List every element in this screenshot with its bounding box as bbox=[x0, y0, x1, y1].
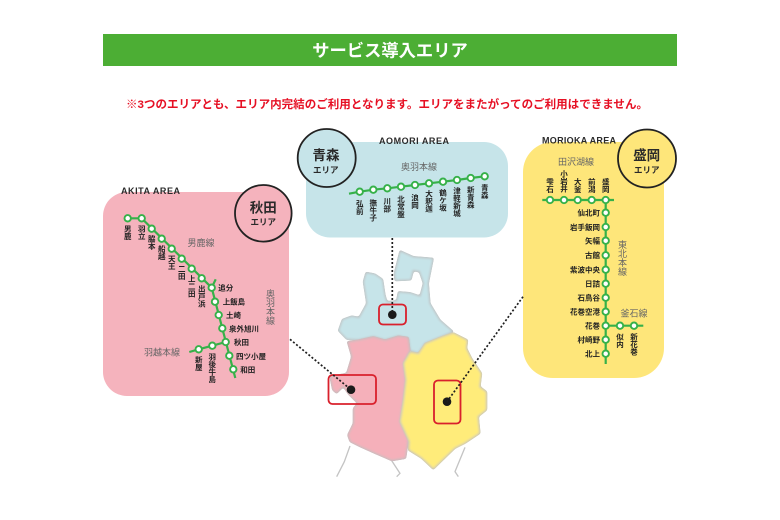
station labels: Morioka: 前潟 bbox=[587, 177, 596, 194]
line names: Akita: 奥羽本線 bbox=[265, 288, 275, 326]
map: Tohoku three prefectures bbox=[330, 251, 487, 477]
station labels: Morioka: 盛岡 bbox=[601, 177, 610, 193]
panel: Akita area: AKITA AREA bbox=[121, 186, 180, 196]
panel: Morioka area: MORIOKA AREA bbox=[542, 136, 616, 146]
station labels: Morioka: 花巻 bbox=[585, 320, 600, 330]
panel: Aomori area bbox=[298, 129, 508, 238]
station labels: Morioka: 新花巻 bbox=[629, 332, 638, 356]
station labels: Akita bbox=[123, 225, 266, 384]
line names: Akita: 羽越本線 bbox=[144, 346, 180, 358]
station labels: Aomori: 撫牛子 bbox=[369, 198, 378, 223]
badge: Akita bbox=[235, 185, 292, 242]
line names: Akita: 男鹿線 bbox=[188, 237, 215, 248]
station labels: Akita: 男鹿 bbox=[123, 225, 132, 241]
station labels: Morioka: 石鳥谷 bbox=[578, 292, 600, 302]
connector: Aomori panel to map bbox=[391, 238, 393, 315]
rail line: Oga and Ou main lines bbox=[128, 218, 235, 378]
stations: Akita bbox=[124, 215, 236, 372]
map border lines to neighbours bbox=[337, 446, 465, 477]
line name: Aomori: 奥羽本線 bbox=[401, 161, 437, 172]
station labels: Akita: 和田 bbox=[240, 364, 255, 374]
stations: Morioka bbox=[547, 197, 637, 357]
marker: Akita highlight bbox=[328, 375, 376, 404]
line names: Morioka: 東北本線 bbox=[617, 239, 627, 277]
station labels: Morioka: 北上 bbox=[585, 348, 600, 358]
badge: Morioka: 盛岡 bbox=[633, 147, 660, 163]
badge: Aomori: エリア bbox=[313, 165, 339, 175]
station labels: Morioka: 仙北町 bbox=[578, 208, 600, 218]
panel: Morioka area bbox=[523, 130, 676, 378]
prefecture: Akita bbox=[330, 336, 410, 461]
station labels: Akita: 泉外旭川 bbox=[229, 324, 259, 334]
station labels: Akita: 天王 bbox=[167, 255, 176, 270]
station labels: Aomori: 鶴ケ坂 bbox=[438, 188, 448, 213]
title banner: サービス導入エリア bbox=[312, 40, 468, 60]
connector: Akita panel to map bbox=[290, 339, 351, 390]
station labels: Akita: 羽立 bbox=[137, 225, 146, 240]
station labels: Akita: 土崎 bbox=[226, 310, 241, 320]
rail line: Ou main line Aomori bbox=[349, 176, 485, 194]
station labels: Aomori bbox=[355, 183, 489, 223]
panel: Akita area bbox=[103, 185, 292, 396]
badge: Akita: エリア bbox=[251, 217, 277, 227]
station labels: Morioka: 似内 bbox=[615, 333, 624, 349]
station labels: Akita: 上飯島 bbox=[223, 296, 246, 306]
station labels: Aomori: 大釈迦 bbox=[424, 189, 434, 214]
station labels: Aomori: 川部 bbox=[383, 198, 392, 214]
station labels: Aomori: 浪岡 bbox=[410, 193, 420, 209]
line names: Morioka bbox=[558, 156, 648, 318]
prefecture: Aomori bbox=[338, 251, 453, 353]
station labels: Morioka: 岩手飯岡 bbox=[570, 222, 600, 232]
badge: Morioka: エリア bbox=[634, 165, 660, 175]
station labels: Akita: 羽後牛島 bbox=[208, 353, 217, 384]
station labels: Morioka: 村崎野 bbox=[578, 334, 600, 344]
station labels: Akita: 二田 bbox=[177, 265, 186, 281]
station labels: Morioka bbox=[545, 169, 638, 358]
station labels: Akita: 船越 bbox=[157, 244, 166, 261]
station labels: Aomori: 弘前 bbox=[355, 200, 364, 216]
connector: Morioka panel to map bbox=[447, 297, 523, 402]
station labels: Akita: 四ツ小屋 bbox=[236, 351, 266, 361]
station labels: Akita: 追分 bbox=[218, 282, 234, 292]
panel: Aomori area: AOMORI AREA bbox=[379, 136, 450, 146]
badge: Morioka bbox=[618, 130, 676, 188]
station labels: Morioka: 矢幅 bbox=[585, 236, 600, 246]
station labels: Akita: 上二田 bbox=[187, 274, 196, 299]
station labels: Akita: 出戸浜 bbox=[197, 284, 206, 309]
station labels: Akita: 脇本 bbox=[147, 234, 156, 251]
station labels: Morioka: 古館 bbox=[585, 250, 600, 260]
badge: Aomori bbox=[298, 129, 356, 187]
station labels: Akita: 新屋 bbox=[194, 355, 203, 372]
station labels: Morioka: 花巻空港 bbox=[570, 306, 600, 316]
station labels: Morioka: 紫波中央 bbox=[570, 264, 600, 274]
title banner bbox=[103, 34, 677, 66]
badge: Akita: 秋田 bbox=[250, 200, 277, 216]
station labels: Morioka: 小岩井 bbox=[559, 169, 568, 194]
station labels: Aomori: 青森 bbox=[480, 183, 489, 200]
station labels: Morioka: 雫石 bbox=[545, 178, 554, 194]
marker: Aomori highlight bbox=[379, 304, 406, 324]
station labels: Morioka: 大釜 bbox=[573, 177, 582, 193]
line names: Morioka: 釜石線 bbox=[620, 308, 648, 318]
prefecture: Iwate bbox=[400, 333, 487, 469]
rail line: Tazawako, Tohoku, Kamaishi lines bbox=[542, 200, 643, 364]
marker: Morioka highlight bbox=[434, 380, 460, 424]
station labels: Aomori: 新青森 bbox=[466, 185, 475, 210]
station labels: Morioka: 日詰 bbox=[585, 278, 600, 288]
badge: Aomori: 青森 bbox=[312, 147, 340, 163]
line names: Morioka: 田沢湖線 bbox=[558, 156, 594, 167]
line names: Akita bbox=[144, 237, 275, 358]
station labels: Akita: 秋田 bbox=[234, 337, 249, 347]
station labels: Aomori: 津軽新城 bbox=[452, 186, 462, 218]
stations: Aomori bbox=[356, 173, 488, 195]
notice text: ※3つのエリアとも、エリア内完結のご利用となります。エリアをまたがってのご利用はできません。 bbox=[126, 97, 648, 111]
station labels: Aomori: 北常盤 bbox=[396, 194, 406, 218]
